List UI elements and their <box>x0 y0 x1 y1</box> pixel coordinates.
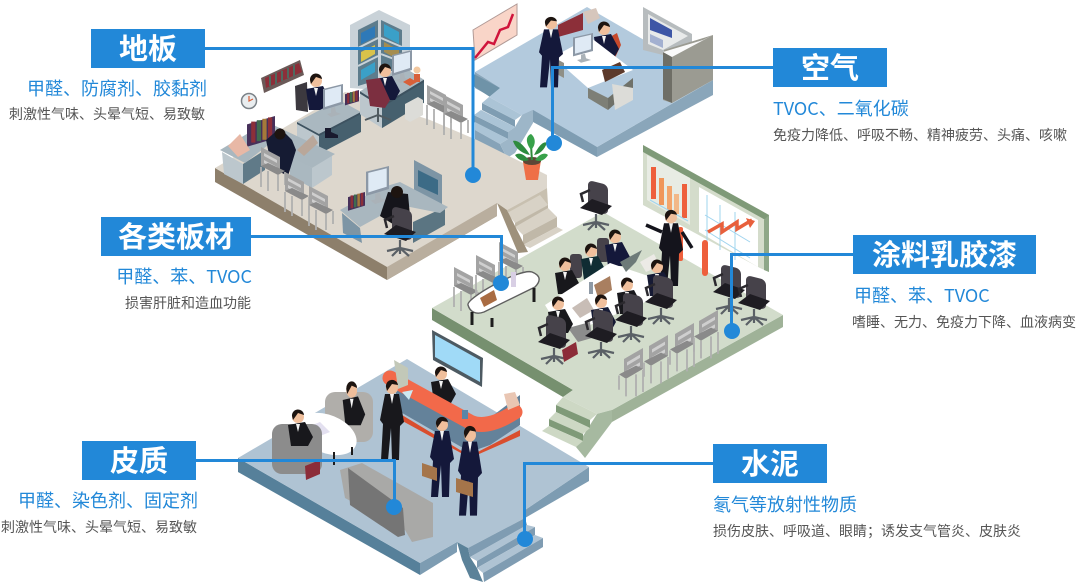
leader line: 地板 <box>205 48 481 183</box>
sofa <box>340 463 433 542</box>
panel: beige office floor <box>215 10 563 280</box>
office chair far <box>580 180 612 230</box>
armchair with man <box>272 409 322 480</box>
front desk with computer <box>340 160 448 256</box>
panel: blue lobby floor <box>238 330 589 582</box>
far side people <box>555 229 630 294</box>
bookshelf partition <box>643 7 713 103</box>
meeting table <box>545 250 660 342</box>
text: 各类板材 substances: 甲醛、苯、TVOC <box>116 263 252 289</box>
text: 水泥 effects: 损伤皮肤、呼吸道、眼睛；诱发支气管炎、皮肤炎 <box>713 521 1021 541</box>
leader line: 涂料乳胶漆 <box>724 254 853 339</box>
round table <box>291 405 363 465</box>
desk with seated woman <box>360 50 424 128</box>
icon: potted plant <box>513 134 548 180</box>
wall chart <box>473 4 517 60</box>
panel: green meeting floor <box>432 145 783 422</box>
gray chairs by wall <box>427 85 468 139</box>
heading: 皮质 <box>82 438 196 480</box>
presentation board <box>643 145 769 276</box>
heading: 涂料乳胶漆: 涂料乳胶漆 <box>872 232 1017 274</box>
leader line: 水泥 <box>517 464 713 547</box>
callout: 各类板材 <box>101 214 509 313</box>
text: 皮质 effects: 刺激性气味、头晕气短、易致敏 <box>1 517 197 537</box>
oval side table <box>468 272 539 327</box>
text: 空气 effects: 免疫力降低、呼吸不畅、精神疲劳、头痛、咳嗽 <box>773 125 1067 145</box>
heading: 皮质: 皮质 <box>110 438 168 480</box>
standing people <box>380 380 482 516</box>
text: 地板 effects: 刺激性气味、头晕气短、易致敏 <box>9 104 205 124</box>
callout: 空气 <box>546 45 1067 151</box>
stairs: beige <box>497 188 563 253</box>
armchair with woman <box>325 381 373 442</box>
heading: 各类板材: 各类板材 <box>118 214 234 256</box>
wall book shelf <box>261 60 304 93</box>
text: 水泥 substances: 氡气等放射性物质 <box>713 491 857 517</box>
heading: 水泥 <box>713 441 827 483</box>
heading: 水泥: 水泥 <box>741 441 799 483</box>
callout: 涂料乳胶漆 <box>724 232 1076 339</box>
text: 涂料乳胶漆 substances: 甲醛、苯、TVOC <box>854 282 990 308</box>
text: 皮质 substances: 甲醛、染色剂、固定剂 <box>18 487 198 513</box>
stairs: green <box>542 397 612 458</box>
text: 涂料乳胶漆 effects: 嗜睡、无力、免疫力下降、血液病变 <box>852 312 1076 332</box>
callout: 皮质 <box>1 438 402 537</box>
gray chairs front row <box>619 310 718 396</box>
callout: 地板 <box>9 26 481 183</box>
presenter <box>646 210 692 286</box>
near side people and chairs <box>538 259 677 364</box>
stairs: blue <box>474 97 533 158</box>
desk with seated man <box>295 73 361 154</box>
reception desk <box>390 360 520 458</box>
heading: 空气: 空气 <box>801 45 859 87</box>
heading: 空气 <box>773 45 887 87</box>
panel: blue office floor <box>472 4 713 158</box>
dark chairs right <box>713 264 770 325</box>
text: 空气 substances: TVOC、二氧化碳 <box>773 95 909 121</box>
wall screen <box>432 330 483 387</box>
stairs: blue lobby <box>457 518 543 582</box>
leader line: 各类板材 <box>251 236 509 291</box>
callout: 水泥 <box>517 441 1021 547</box>
gray chairs row <box>261 147 333 230</box>
left desk with man and fax <box>220 116 335 188</box>
wall clock <box>242 94 256 108</box>
gray chairs at side table <box>454 242 523 311</box>
desk with two people <box>539 8 633 110</box>
text: 地板 substances: 甲醛、防腐剂、胶黏剂 <box>27 75 207 101</box>
bookcase corner <box>350 10 410 90</box>
heading: 地板 <box>91 26 205 68</box>
text: 各类板材 effects: 损害肝脏和造血功能 <box>125 293 251 313</box>
leader line: 空气 <box>546 68 773 151</box>
heading: 地板: 地板 <box>119 26 177 68</box>
leader line: 皮质 <box>196 460 402 515</box>
